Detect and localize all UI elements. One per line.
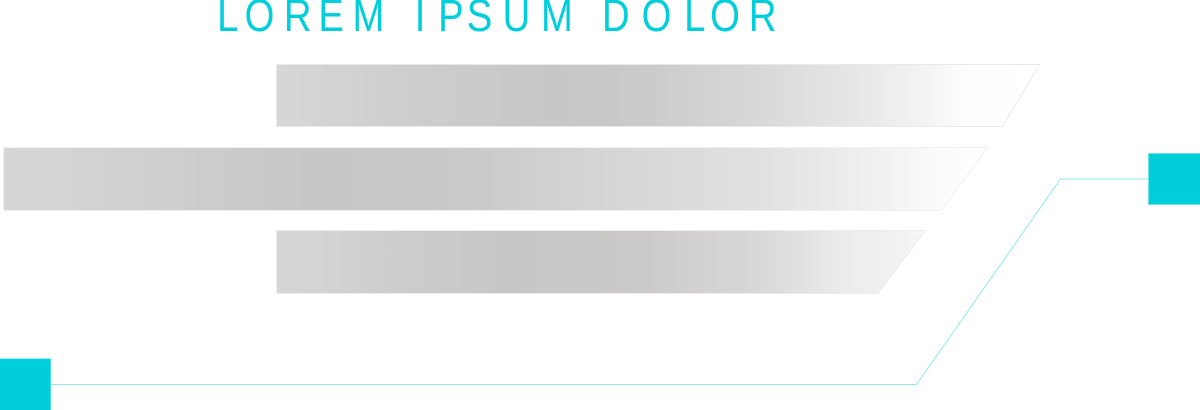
- square: bottom left: [0, 358, 51, 410]
- connector line: [51, 179, 1148, 384]
- bar: top: [276, 64, 1040, 126]
- bar: middle: [4, 148, 988, 210]
- square: top right: [1148, 154, 1200, 204]
- bar: bottom: [276, 230, 926, 294]
